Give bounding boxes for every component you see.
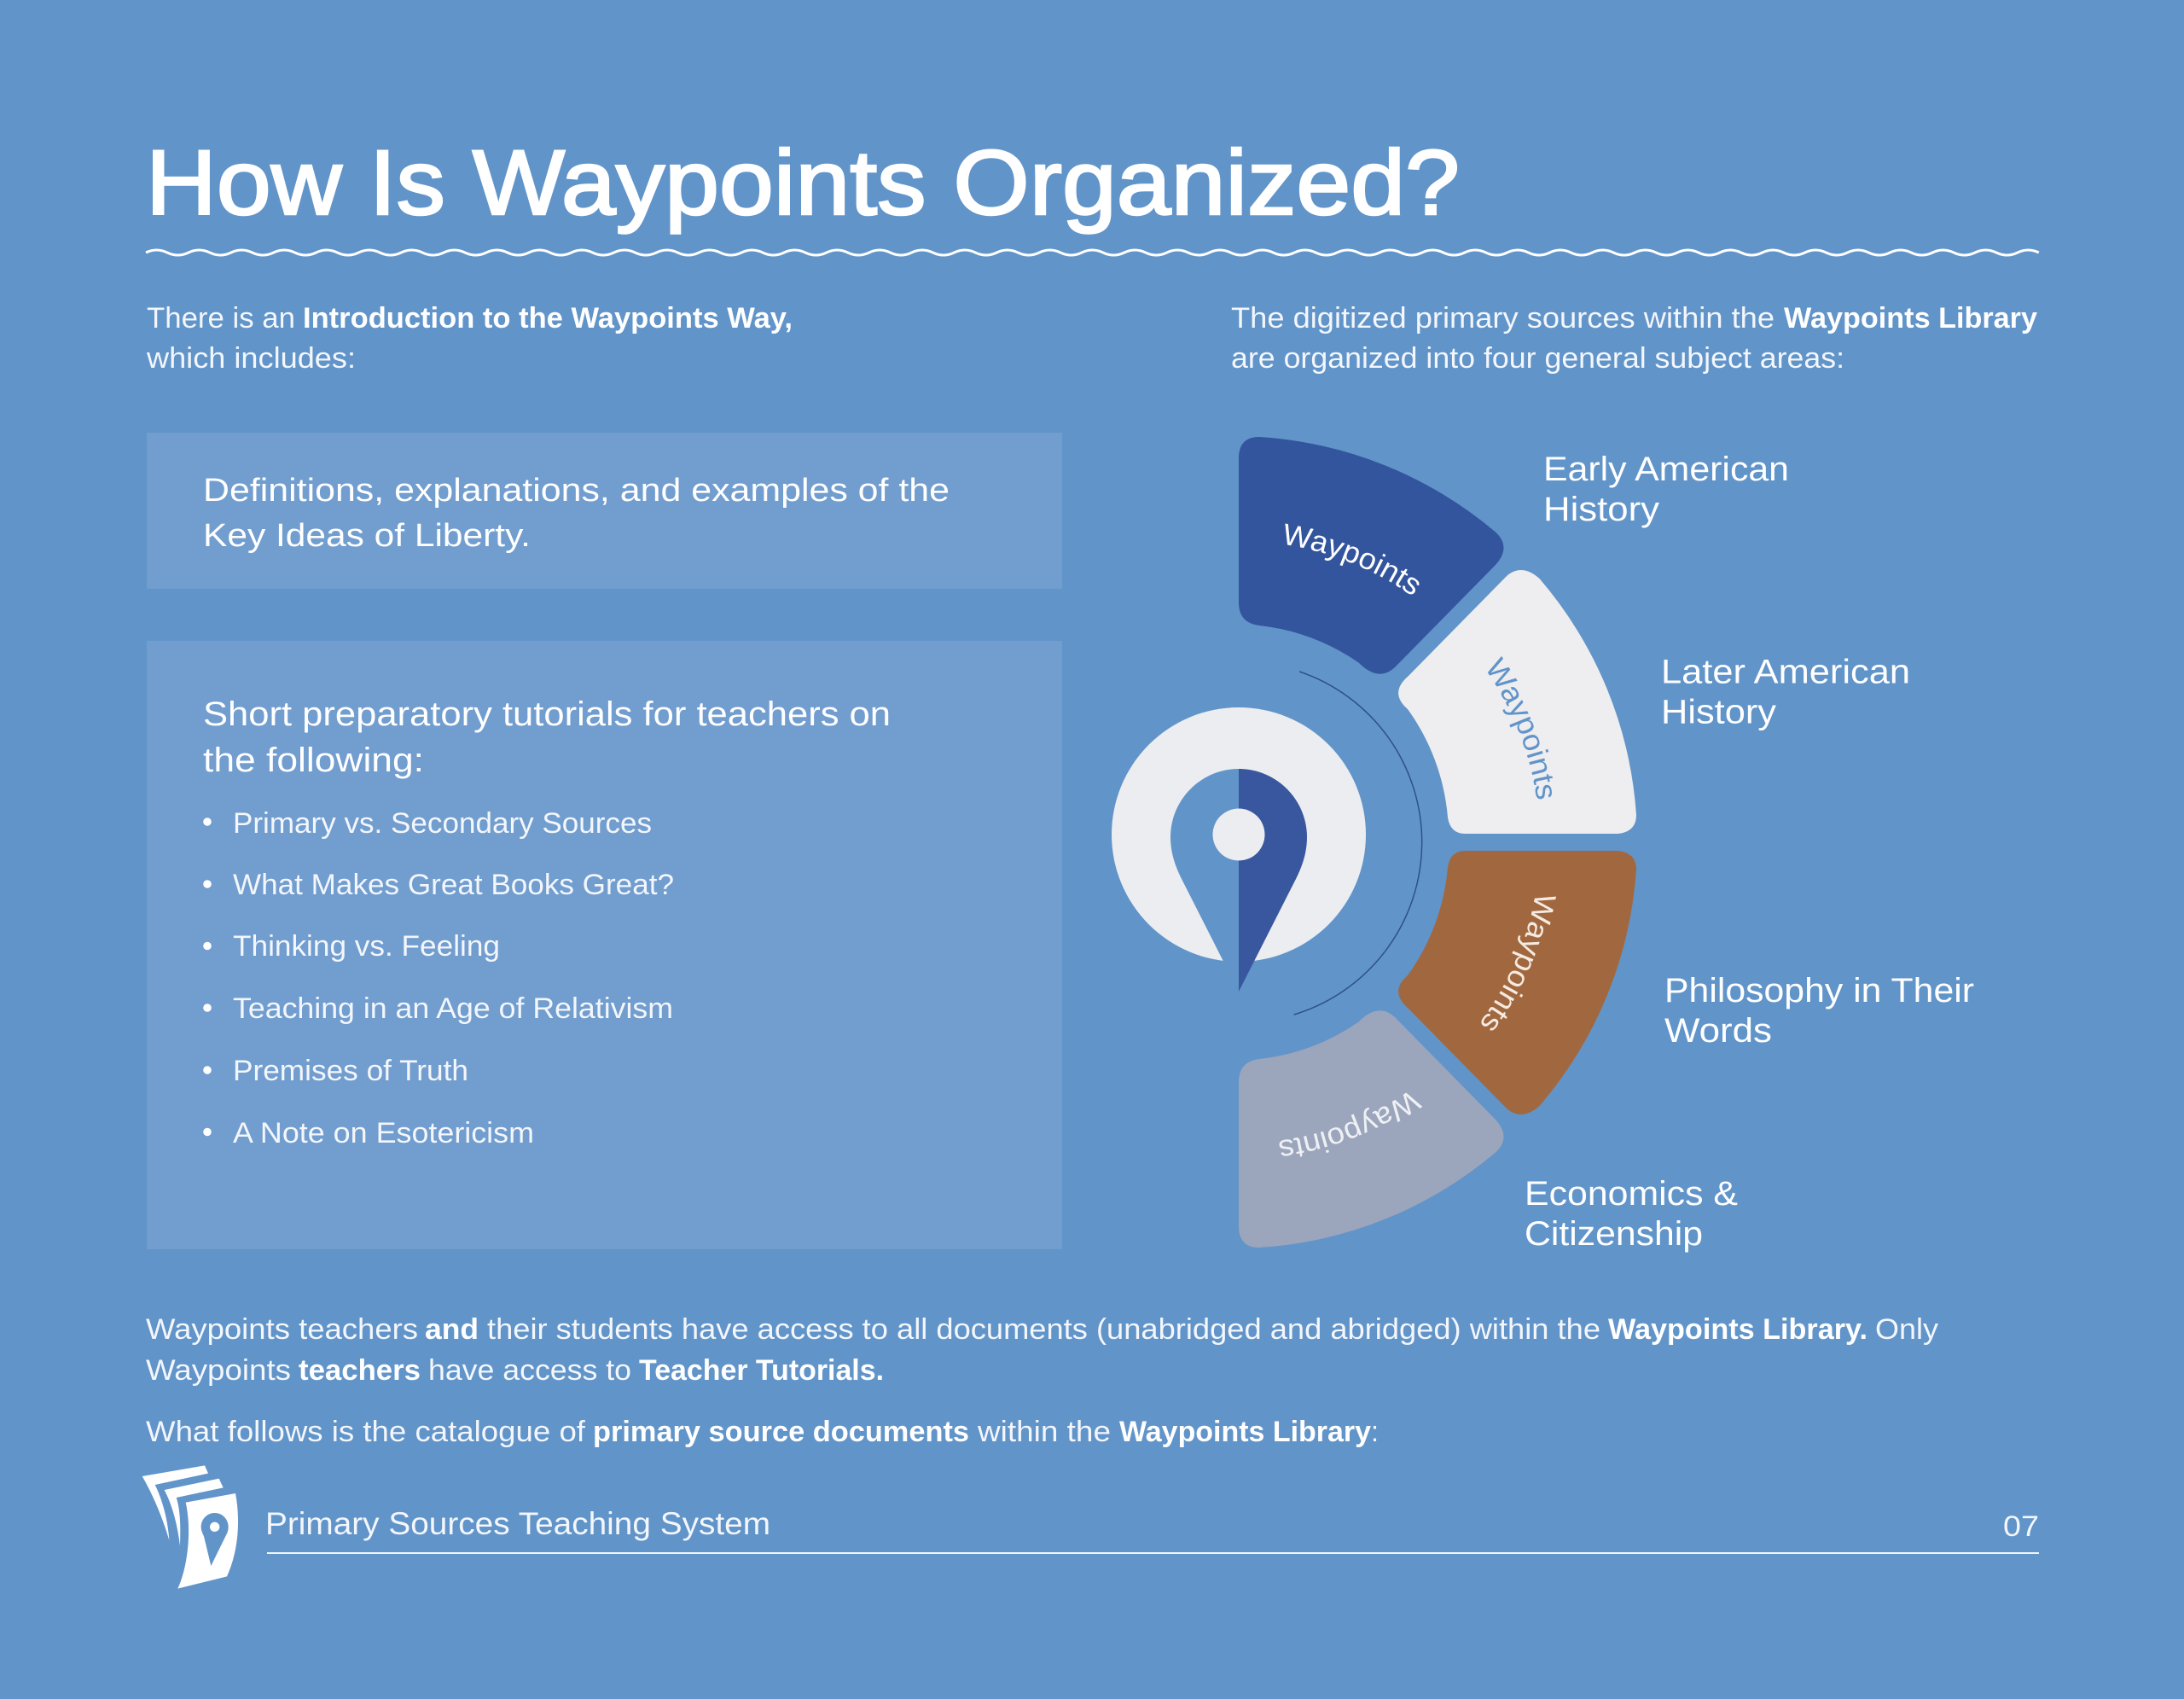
- tutorials heading: the following:: [203, 742, 424, 779]
- intro text: left column: which includes:: [146, 342, 356, 375]
- label: Later American History: Later American: [1661, 654, 1910, 691]
- panel: preparatory tutorials: [147, 641, 1062, 1249]
- text block: access note: Waypoints: [146, 1354, 291, 1387]
- icon: location pin in circle: [1112, 707, 1366, 992]
- footer: system name: Primary Sources Teaching System: [265, 1506, 770, 1541]
- intro text: right column: are organized into four general subject areas:: [1231, 342, 1844, 375]
- segment: Economics and Citizenship: [1239, 1010, 1503, 1248]
- label: Early American History: History: [1543, 491, 1659, 528]
- text block: access note: Waypoints teachers: [146, 1313, 418, 1346]
- tutorials bullet list: Thinking vs. Feeling: [233, 930, 500, 963]
- segment: Later American History: [1398, 570, 1636, 834]
- segment: Philosophy in Their Words: [1398, 851, 1636, 1114]
- text block: catalogue note: within the: [977, 1416, 1111, 1448]
- tutorials bullet list: Teaching in an Age of Relativism: [233, 992, 673, 1025]
- text block: catalogue note: What follows is the catalogue of: [146, 1416, 586, 1448]
- intro text: right column: [1231, 302, 2037, 375]
- text block: access note: teachers: [299, 1354, 421, 1387]
- label: Economics and Citizenship: Citizenship: [1525, 1215, 1703, 1253]
- label: Early American History: [1543, 451, 1789, 528]
- text block: catalogue note: primary source documents: [593, 1416, 969, 1448]
- intro text: left column: Introduction to the Waypoints Way,: [303, 302, 793, 335]
- text block: access note: their students have access to all documents (unabridged and abridged) within the: [487, 1313, 1600, 1346]
- tutorials bullet list: Primary vs. Secondary Sources: [233, 807, 652, 840]
- text block: catalogue note: [146, 1416, 1379, 1448]
- segment: Economics and Citizenship: Waypoints: [1280, 1092, 1423, 1157]
- intro text: left column: [146, 302, 793, 375]
- footer: page number: 07: [2003, 1510, 2039, 1543]
- tutorials bullet list: Premises of Truth: [233, 1055, 468, 1087]
- segment: Early American History: [1239, 437, 1503, 674]
- label: Philosophy in Their Words: [1664, 972, 1974, 1050]
- label: Philosophy in Their Words: Philosophy in Their: [1664, 972, 1974, 1010]
- tutorials heading: Short preparatory tutorials for teachers on: [203, 695, 891, 733]
- text block: access note: and: [425, 1313, 479, 1346]
- tutorials bullet list: [203, 807, 674, 1149]
- label: Later American History: History: [1661, 693, 1776, 730]
- intro text: right column: Waypoints Library: [1784, 302, 2037, 335]
- panel: key ideas definitions: Key Ideas of Liberty.: [203, 518, 531, 554]
- segment: Later American History: Waypoints: [1488, 655, 1553, 799]
- segment: Early American History: Waypoints: [1285, 524, 1420, 594]
- tutorials bullet list: A Note on Esotericism: [233, 1117, 534, 1149]
- intro text: left column: There is an: [147, 302, 295, 335]
- label: Later American History: [1661, 654, 1910, 730]
- text block: access note: Only: [1875, 1313, 1938, 1346]
- text block: catalogue note: :: [1371, 1416, 1379, 1448]
- panel: key ideas definitions: Definitions, explanations, and examples of the: [203, 473, 950, 509]
- tutorials bullet list: What Makes Great Books Great?: [233, 869, 674, 901]
- text block: access note: [146, 1313, 1938, 1387]
- tutorials heading: [203, 695, 891, 779]
- panel: key ideas definitions: [147, 433, 1062, 589]
- text block: catalogue note: Waypoints Library: [1119, 1416, 1371, 1448]
- diagram: subject area wheel: [1112, 437, 1636, 1248]
- label: Philosophy in Their Words: Words: [1664, 1012, 1772, 1050]
- text block: access note: Waypoints Library.: [1608, 1313, 1867, 1346]
- text block: access note: have access to: [428, 1354, 631, 1387]
- text block: access note: Teacher Tutorials.: [639, 1354, 884, 1387]
- intro text: right column: The digitized primary sources within the: [1231, 302, 1774, 335]
- label: Economics and Citizenship: [1525, 1175, 1738, 1253]
- label: Economics and Citizenship: Economics &: [1525, 1175, 1738, 1213]
- title: How Is Waypoints Organized?: [146, 131, 1460, 234]
- segment: Philosophy in Their Words: Waypoints: [1481, 896, 1556, 1031]
- icon: Waypoints logo, stacked pages with pin: [142, 1465, 238, 1589]
- label: Early American History: Early American: [1543, 451, 1789, 488]
